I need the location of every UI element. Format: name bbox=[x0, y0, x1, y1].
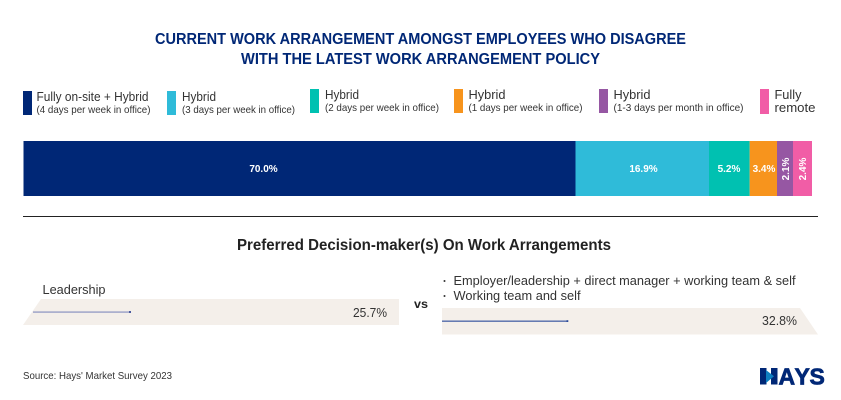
bar line: leadership bbox=[33, 311, 131, 313]
segment: 2.4%: 2.4% bbox=[798, 157, 809, 180]
vs label: vs bbox=[414, 299, 428, 311]
legend item: hybrid 1-3 days per month bbox=[599, 88, 744, 114]
legend item: fully remote: remote bbox=[774, 101, 816, 115]
legend item: hybrid 1 day: (1 days per week in office) bbox=[468, 102, 582, 114]
title: WITH THE LATEST WORK ARRANGEMENT POLICY bbox=[241, 51, 601, 68]
logo: Hays: AYS bbox=[778, 364, 825, 390]
legend item: hybrid 3 days bbox=[167, 90, 295, 116]
panel: employer and team bbox=[442, 274, 818, 334]
title bbox=[155, 31, 686, 68]
legend item: fully on-site + hybrid: (4 days per week in office) bbox=[36, 104, 150, 116]
legend item: hybrid 2 days: (2 days per week in office) bbox=[325, 102, 439, 114]
legend item: hybrid 3 days: (3 days per week in office) bbox=[182, 104, 295, 116]
segment: 2.1%: 2.1% bbox=[781, 157, 792, 180]
segment: 2.1% bbox=[777, 141, 793, 196]
bullet list bbox=[444, 274, 796, 303]
band: leadership bbox=[23, 299, 399, 325]
segment: 5.2% bbox=[709, 141, 750, 196]
bar line: employer and team bbox=[442, 320, 568, 322]
legend item: hybrid 2 days: Hybrid bbox=[325, 88, 359, 102]
legend item: fully on-site + hybrid: Fully on-site + Hybrid bbox=[36, 90, 149, 104]
legend item: hybrid 1-3 days per month: (1-3 days per month in office) bbox=[614, 102, 744, 114]
segment: 16.9% bbox=[576, 141, 709, 196]
heading: preferred decision-makers: Preferred Decision-maker(s) On Work Arrangements bbox=[237, 237, 611, 254]
segment: 5.2%: 5.2% bbox=[718, 164, 741, 175]
segment: 3.4% bbox=[750, 141, 777, 196]
source note: Source: Hays' Market Survey 2023 bbox=[23, 370, 172, 382]
panel: leadership bbox=[23, 283, 399, 325]
legend item: fully remote bbox=[760, 88, 816, 115]
title: CURRENT WORK ARRANGEMENT AMONGST EMPLOYEES WHO DISAGREE bbox=[155, 31, 686, 48]
legend item: fully on-site + hybrid bbox=[23, 90, 150, 116]
segment: 16.9%: 16.9% bbox=[629, 164, 658, 175]
bullet list: Working team and self bbox=[454, 289, 581, 303]
segment: 2.4% bbox=[793, 141, 812, 196]
label: leadership: Leadership bbox=[42, 283, 106, 297]
segment: 70.0% bbox=[24, 141, 576, 196]
stacked bar chart bbox=[24, 141, 812, 196]
legend item: hybrid 1-3 days per month: Hybrid bbox=[614, 88, 651, 102]
band: employer and team bbox=[442, 308, 818, 334]
legend item: hybrid 1 day: Hybrid bbox=[468, 88, 506, 102]
bullet list: Employer/leadership + direct manager + working team & self bbox=[454, 274, 796, 288]
segment: 3.4%: 3.4% bbox=[753, 164, 776, 175]
legend item: hybrid 2 days bbox=[310, 88, 439, 114]
legend bbox=[23, 88, 816, 116]
value: 32.8%: 32.8% bbox=[762, 314, 797, 328]
value: 25.7%: 25.7% bbox=[353, 306, 387, 320]
legend item: fully remote: Fully bbox=[774, 88, 802, 102]
legend item: hybrid 3 days: Hybrid bbox=[182, 90, 216, 104]
segment: 70.0%: 70.0% bbox=[249, 164, 278, 175]
legend item: hybrid 1 day bbox=[454, 88, 582, 114]
